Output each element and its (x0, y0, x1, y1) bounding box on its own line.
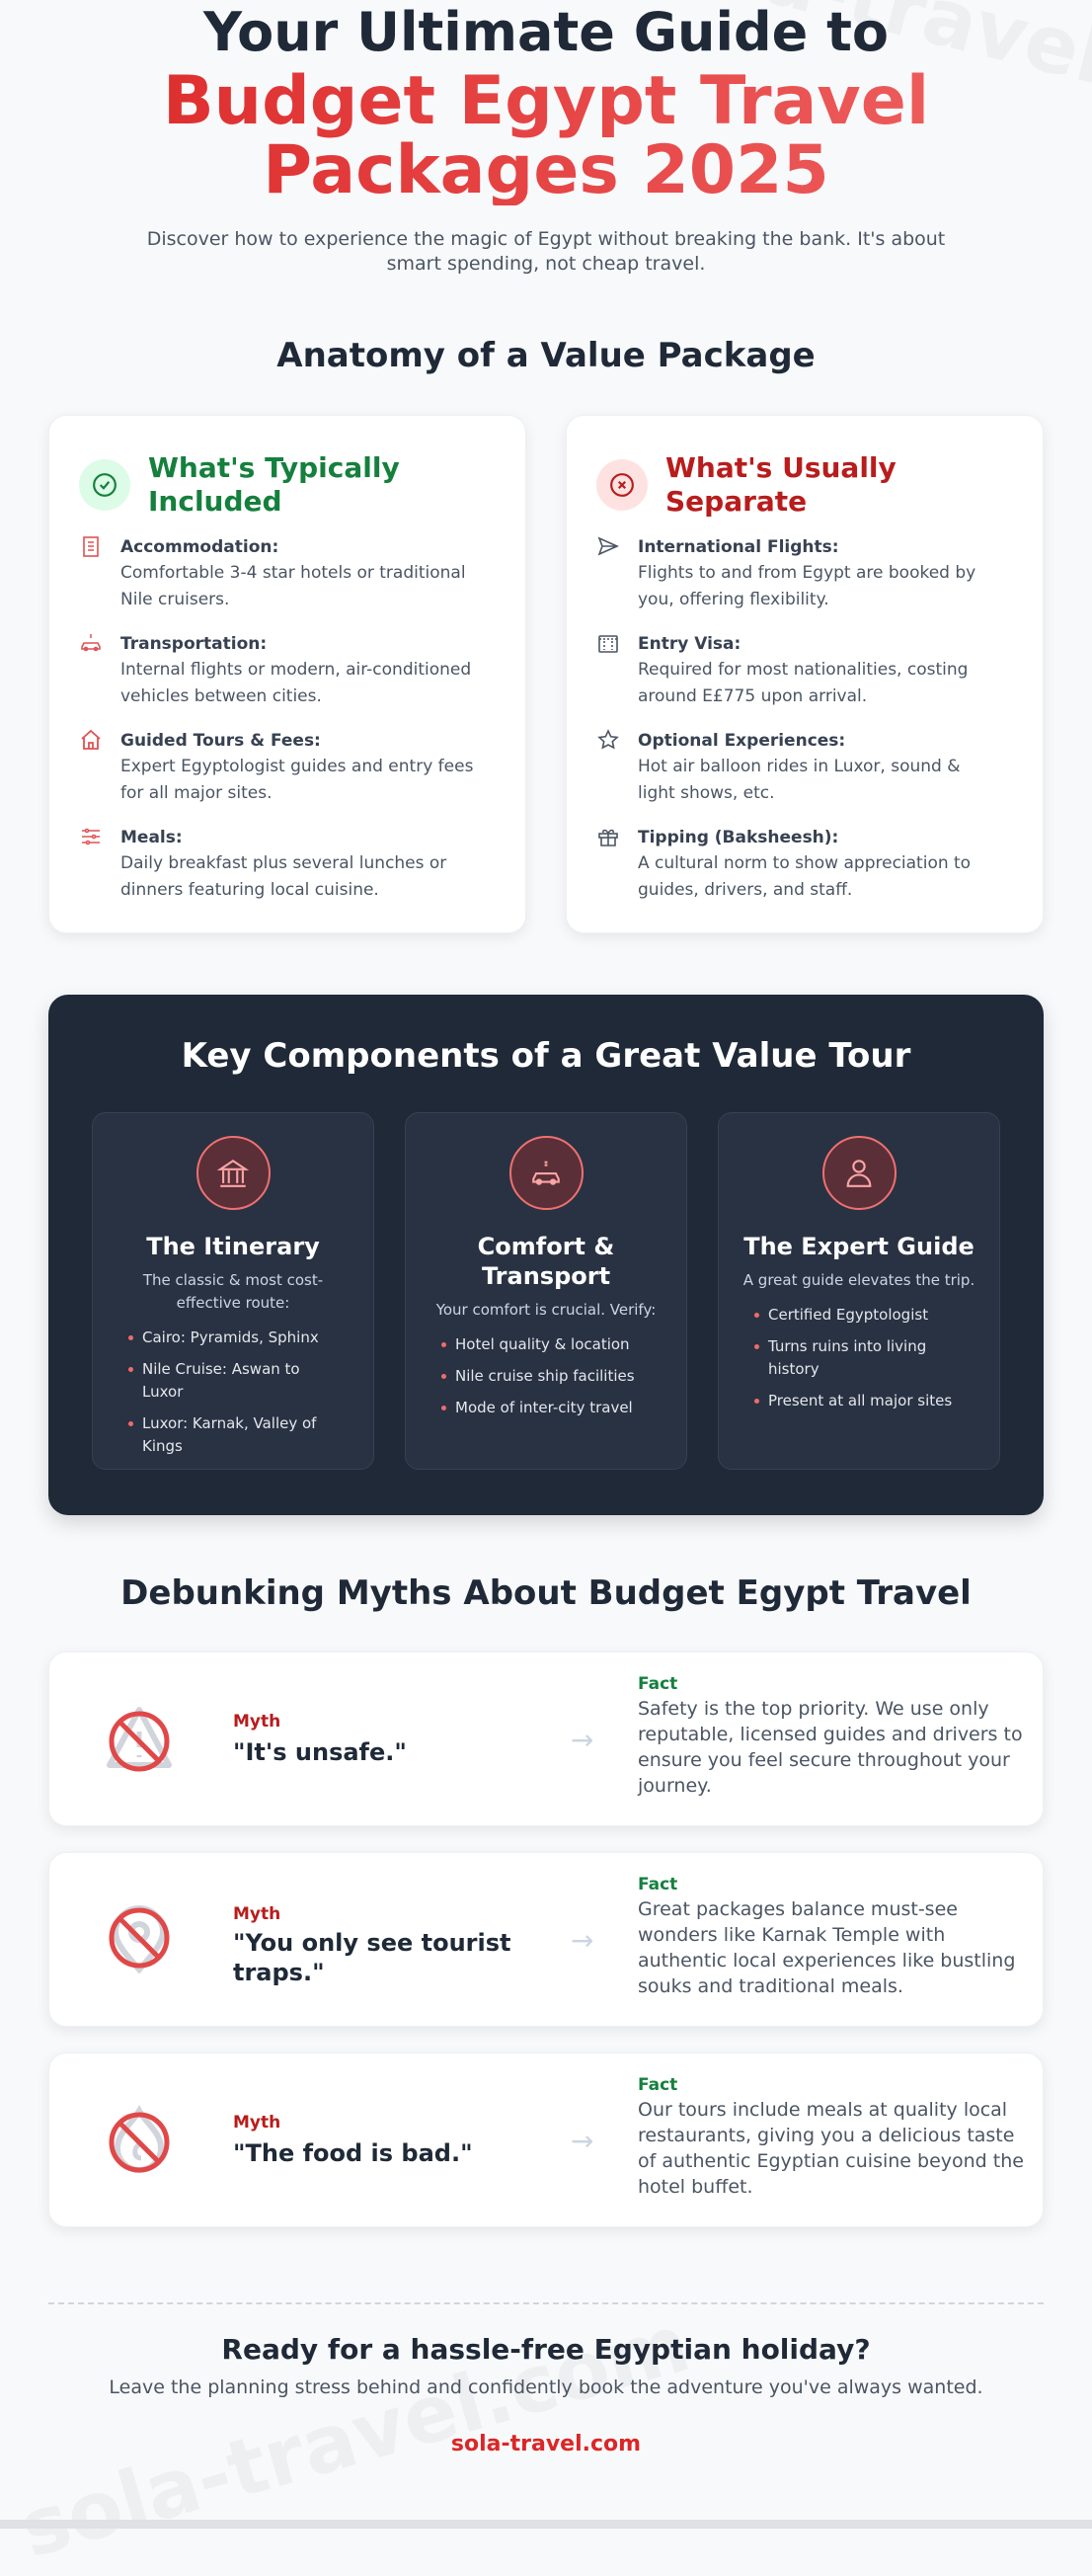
myth card: unsafe: Myth (233, 1712, 280, 1731)
card: comfort: Nile cruise ship facilities (455, 1367, 635, 1385)
icon: pin crossed (109, 1905, 170, 1973)
item: flights: International Flights: (638, 537, 839, 557)
card: itinerary: Luxor: Karnak, Valley of Kings (142, 1414, 316, 1455)
header: included (79, 451, 400, 518)
panel: separate (566, 415, 1044, 933)
item: transportation: Internal flights or modern, air-conditioned vehicles between cities. (120, 660, 471, 706)
item: visa (598, 634, 968, 706)
item: accommodation: Accommodation: (120, 537, 278, 557)
myth card: food: "The food is bad." (233, 2139, 473, 2167)
myth card: food: Myth (233, 2113, 280, 2133)
item: meals (82, 828, 446, 900)
item: transportation: Transportation: (120, 634, 267, 654)
cta heading: Ready for a hassle-free Egyptian holiday? (221, 2333, 871, 2366)
item: flights (598, 537, 975, 609)
header: separate: Separate (665, 485, 807, 518)
fact text: Safety is the top priority. We use only reputable, licensed guides and drivers to ensure you feel secure throughout your journey. (638, 1698, 1023, 1797)
item: meals: Daily breakfast plus several lunches or dinners featuring local cuisine. (120, 853, 446, 900)
card: guide: The Expert Guide (743, 1233, 975, 1260)
card: guide: Certified Egyptologist (768, 1306, 928, 1324)
myth card: tourist traps: "You only see tourist traps." (233, 1929, 510, 1986)
icon: flame crossed (109, 2105, 170, 2173)
title: Your Ultimate Guide to (203, 1, 889, 63)
item: optional: Optional Experiences: (638, 731, 845, 751)
header: included: Included (148, 485, 282, 518)
title (163, 1, 929, 209)
item: guided tours: Expert Egyptologist guides and entry fees for all major sites. (120, 757, 473, 803)
subtitle: Discover how to experience the magic of Egypt without breaking the bank. It's about smart spending, not cheap travel. (147, 228, 945, 275)
myth card: food (48, 2053, 1044, 2227)
fact text: Great packages balance must-see wonders like Karnak Temple with authentic local experiences like bustling souks and traditional meals. (638, 1898, 1015, 1997)
myth card: tourist traps: Myth (233, 1904, 280, 1924)
card: guide (718, 1112, 1000, 1470)
header: separate (596, 451, 897, 518)
myth card: unsafe: "It's unsafe." (233, 1738, 407, 1766)
heading: myths: Debunking Myths About Budget Egypt Travel (120, 1573, 972, 1613)
card: comfort (405, 1112, 687, 1470)
panel: included (48, 415, 526, 933)
item: visa: Required for most nationalities, costing around E£775 upon arrival. (638, 660, 968, 706)
item: tipping (598, 828, 971, 900)
title: Packages 2025 (263, 131, 829, 209)
card: comfort: Hotel quality & location (455, 1335, 630, 1353)
fact text: Our tours include meals at quality local restaurants, giving you a delicious taste of authentic Egyptian cuisine beyond the hotel buffet. (638, 2099, 1024, 2198)
header: included: What's Typically (148, 451, 400, 484)
fact text: Fact (638, 1674, 677, 1694)
icon: warning crossed (107, 1707, 172, 1772)
item: tipping: Tipping (Baksheesh): (638, 828, 838, 847)
item: optional: Hot air balloon rides in Luxor, sound & light shows, etc. (638, 757, 960, 803)
item: flights: Flights to and from Egypt are booked by you, offering flexibility. (638, 563, 975, 609)
myth card: unsafe (48, 1651, 1044, 1826)
fact text: Fact (638, 1875, 677, 1894)
card: comfort: Comfort & (478, 1233, 614, 1260)
fact text: Fact (638, 2075, 677, 2095)
cta text: Leave the planning stress behind and confidently book the adventure you've always wanted. (109, 2376, 983, 2398)
card: itinerary (92, 1112, 374, 1470)
cta link: sola-travel.com (451, 2432, 641, 2456)
icon: person (821, 1136, 897, 1210)
item: guided tours (81, 729, 473, 803)
card: comfort: Mode of inter-city travel (455, 1399, 633, 1416)
card: itinerary: Cairo: Pyramids, Sphinx (142, 1328, 319, 1346)
item: tipping: A cultural norm to show appreciation to guides, drivers, and staff. (638, 853, 971, 900)
item: transportation (81, 634, 471, 706)
panel: key components (48, 995, 1044, 1515)
item: optional (597, 729, 960, 803)
card: comfort: Your comfort is crucial. Verify: (436, 1301, 656, 1319)
card: itinerary: Nile Cruise: Aswan to Luxor (142, 1360, 300, 1401)
icon: car (509, 1136, 583, 1210)
heading: anatomy: Anatomy of a Value Package (276, 336, 816, 375)
item: meals: Meals: (120, 828, 183, 847)
myth card: food: → (571, 2125, 593, 2157)
card: guide: Present at all major sites (768, 1392, 952, 1409)
card: comfort: Transport (482, 1262, 610, 1290)
card: guide: Turns ruins into living history (768, 1337, 926, 1378)
watermark bottom: sola-travel.com (11, 2296, 699, 2576)
item: guided tours: Guided Tours & Fees: (120, 731, 321, 751)
myth card: tourist traps (48, 1852, 1044, 2027)
myth card: unsafe: → (571, 1724, 593, 1756)
icon: temple (195, 1136, 271, 1210)
item: visa: Entry Visa: (638, 634, 741, 654)
heading: key components: Key Components of a Great Value Tour (182, 1036, 910, 1076)
header: separate: What's Usually (665, 451, 897, 484)
card: guide: A great guide elevates the trip. (743, 1271, 975, 1289)
myth card: tourist traps: → (571, 1924, 593, 1957)
item: accommodation (83, 536, 466, 609)
title: Budget Egypt Travel (163, 62, 929, 140)
card: itinerary: The Itinerary (146, 1233, 320, 1260)
card: itinerary: The classic & most cost-effective route: (143, 1271, 323, 1312)
item: accommodation: Comfortable 3-4 star hotels or traditional Nile cruisers. (120, 563, 466, 609)
